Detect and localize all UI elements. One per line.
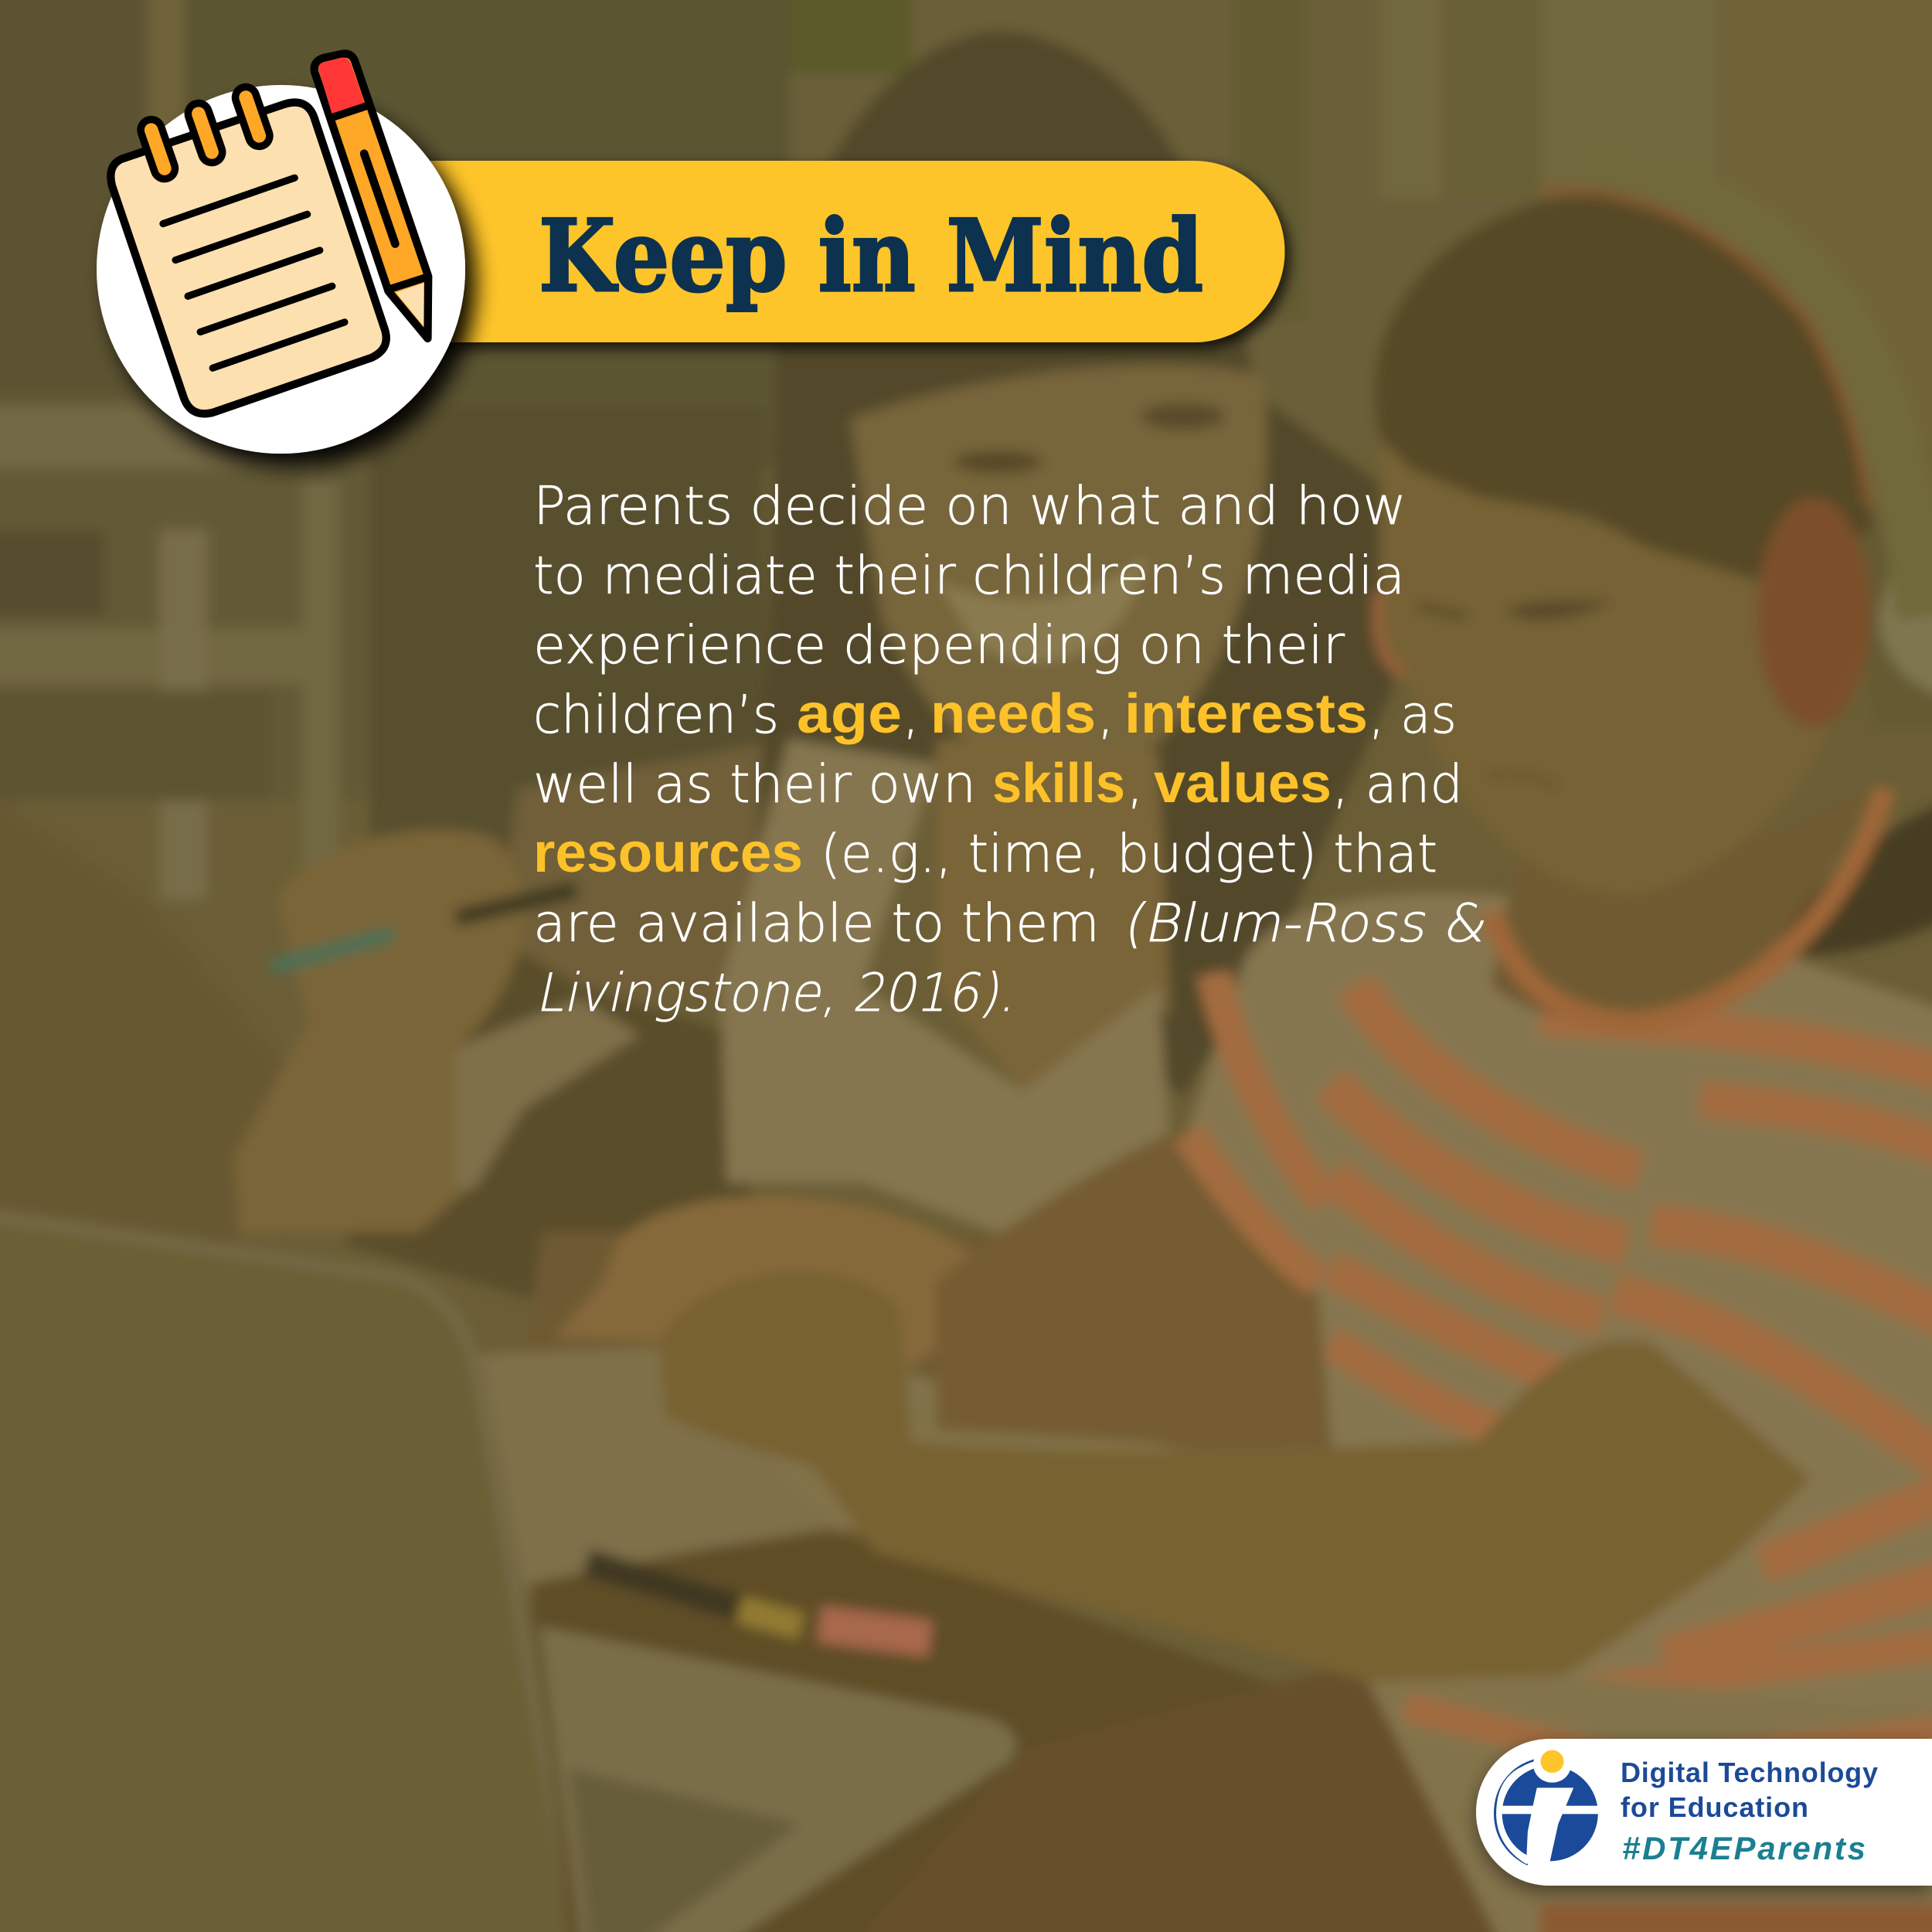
arm right — [937, 1109, 1325, 1478]
girl shirt base — [1183, 893, 1932, 1787]
hand with pen left — [234, 830, 525, 1232]
logo text: Digital Technology — [1621, 1757, 1878, 1788]
logo badge: Digital Technology for Education: for Education — [1621, 1791, 1808, 1823]
hashtag: #DT4EParents — [1622, 1830, 1866, 1866]
girl arm and hand — [659, 1271, 1811, 1682]
woman face — [850, 365, 1267, 781]
body paragraph: , — [903, 685, 920, 746]
body paragraph: children’s — [533, 685, 779, 746]
white top — [721, 740, 1171, 1250]
pen on desk — [587, 1563, 740, 1608]
lower table tones — [493, 1232, 1368, 1602]
body paragraph: well as their own — [533, 754, 976, 815]
notepad rings — [151, 97, 259, 168]
body paragraph: (e.g., time, budget) that — [821, 824, 1437, 885]
pencil — [315, 53, 429, 338]
paper highlight — [483, 1355, 838, 1577]
logo badge: Digital Technology for Education — [1476, 1739, 1932, 1886]
body paragraph: to mediate their children’s media — [533, 546, 1405, 607]
keyboard — [570, 1768, 801, 1932]
girl eyes and mouth — [1503, 600, 1614, 621]
notepad sheet — [111, 103, 386, 413]
girl hair — [1375, 196, 1872, 579]
body paragraph: Livingstone, 2016). — [532, 963, 1024, 1024]
body paragraph: needs — [930, 683, 1096, 745]
laptop base — [539, 1627, 1016, 1932]
desk dark wood — [530, 1528, 1602, 1932]
body paragraph: age — [797, 683, 902, 745]
body paragraph: , — [1127, 754, 1144, 815]
woman shoulder — [493, 740, 788, 1022]
body paragraph — [532, 476, 1494, 1024]
girl face — [1380, 444, 1840, 895]
left pen — [271, 934, 394, 968]
body paragraph: values — [1154, 753, 1332, 815]
body paragraph: , as — [1369, 685, 1457, 746]
icon: notepad and pencil in white circle — [97, 53, 465, 454]
headband — [1590, 185, 1928, 616]
banner: Keep in Mind — [417, 161, 1284, 342]
shirt orange stripes — [1189, 974, 1932, 1691]
body paragraph: are available to them — [533, 893, 1100, 954]
title: Keep in Mind — [539, 199, 1203, 315]
body paragraph: resources — [533, 822, 803, 884]
body paragraph: (Blum-Ross & — [1119, 893, 1494, 954]
right dark hair strand — [1774, 788, 1932, 956]
body paragraph: , and — [1332, 754, 1463, 815]
ear cup — [1757, 498, 1870, 727]
woman hand on table — [554, 1196, 1022, 1368]
neck and chest — [937, 740, 1171, 1090]
lower-left dark figure — [0, 764, 284, 1244]
woman hair — [752, 31, 1393, 1097]
body paragraph: Parents decide on what and how — [533, 476, 1406, 537]
outer earcup — [1849, 518, 1932, 727]
laptop lid — [0, 1202, 604, 1932]
girl neck — [1491, 788, 1872, 1022]
body paragraph: experience depending on their — [533, 615, 1345, 676]
body paragraph: interests — [1124, 683, 1368, 745]
notepad lines — [163, 178, 345, 368]
logo mark — [1495, 1747, 1603, 1865]
lower shirt — [1368, 1675, 1932, 1932]
top background tones — [0, 0, 1932, 444]
body paragraph: skills — [992, 753, 1125, 815]
left shelves — [0, 394, 394, 801]
body paragraph: , — [1097, 685, 1114, 746]
